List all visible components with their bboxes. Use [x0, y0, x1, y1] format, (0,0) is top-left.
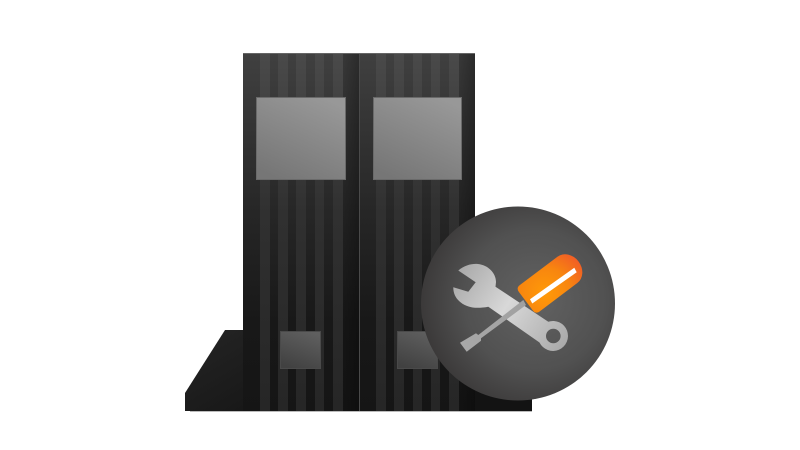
base platform: [185, 330, 532, 412]
icon: wrench: [453, 264, 568, 351]
vent square: right: [398, 332, 438, 368]
server cabinets: [243, 53, 475, 411]
screwdriver handle: [516, 248, 588, 314]
display panel: right: [374, 98, 462, 180]
icon: screwdriver: [460, 248, 588, 352]
display panel: left: [256, 98, 346, 180]
screwdriver shaft: [460, 300, 526, 352]
cabinet: left: [243, 53, 359, 411]
maintenance badge: [421, 206, 615, 400]
screwdriver highlight: [530, 268, 577, 304]
badge disc: [421, 206, 615, 400]
vent square: left: [280, 332, 320, 368]
cabinet: right: [359, 53, 475, 411]
